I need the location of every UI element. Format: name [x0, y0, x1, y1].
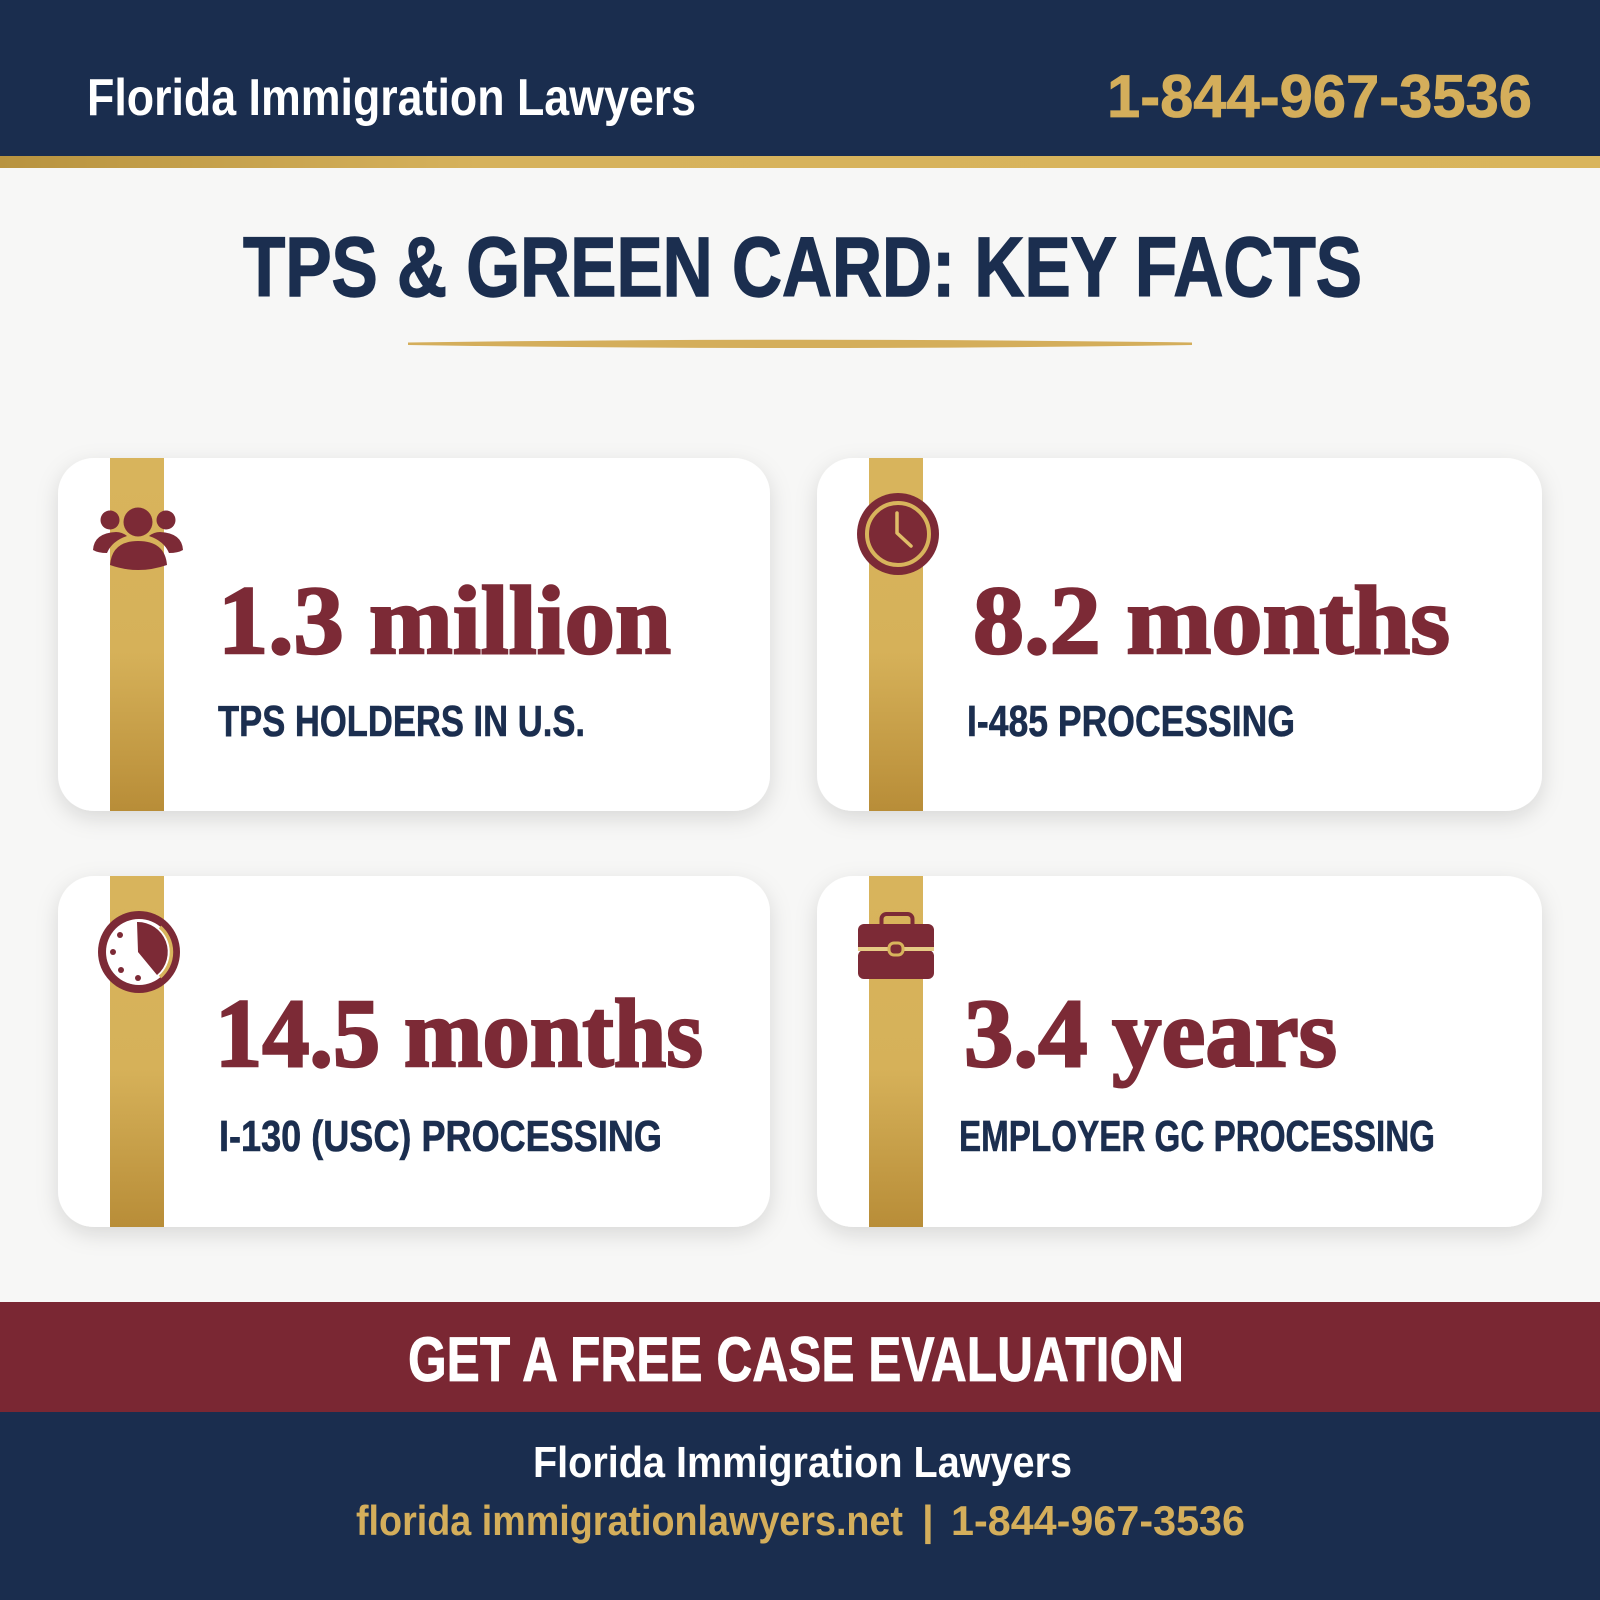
icon: pie clock	[98, 911, 180, 993]
footer phone number: 1-844-967-3536	[951, 1497, 1245, 1544]
title: TPS & GREEN CARD: KEY FACTS	[243, 220, 1362, 314]
footer website: florida immigrationlawyers.net	[356, 1497, 903, 1544]
stat value: 1.3 million	[218, 567, 671, 674]
stat value: 8.2 months	[973, 567, 1450, 674]
panel: employer green card processing	[817, 876, 1542, 1227]
panel: TPS holders	[58, 458, 770, 811]
stat value: 14.5 months	[215, 980, 703, 1087]
call to action text: GET A FREE CASE EVALUATION	[408, 1325, 1184, 1395]
stat label: TPS HOLDERS IN U.S.	[218, 697, 585, 746]
icon: clock	[857, 493, 939, 575]
icon: briefcase	[858, 914, 934, 979]
title underline	[408, 340, 1192, 348]
stat label: EMPLOYER GC PROCESSING	[959, 1112, 1435, 1161]
header phone number: 1-844-967-3536	[1107, 63, 1532, 130]
panel: I-485 processing	[817, 458, 1542, 811]
header bar	[0, 0, 1600, 168]
footer separator: |	[922, 1497, 934, 1545]
call to action band	[0, 1302, 1600, 1412]
footer	[0, 1412, 1600, 1600]
stat value: 3.4 years	[964, 980, 1337, 1087]
footer firm name: Florida Immigration Lawyers	[533, 1438, 1072, 1487]
header firm name: Florida Immigration Lawyers	[87, 69, 696, 127]
icon: people	[93, 508, 183, 570]
panel: I-130 processing	[58, 876, 770, 1227]
stat label: I-130 (USC) PROCESSING	[219, 1112, 662, 1161]
stat label: I-485 PROCESSING	[967, 697, 1295, 746]
